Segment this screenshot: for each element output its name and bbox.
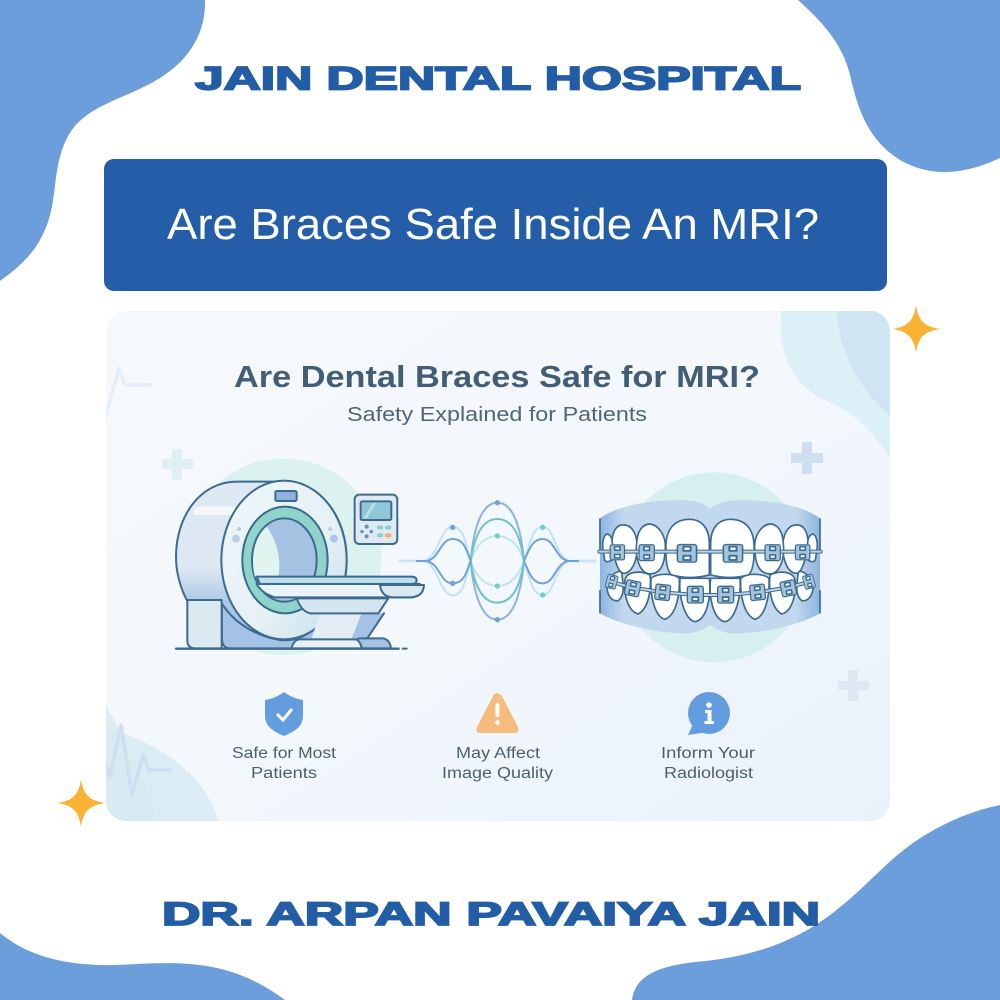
icon: shield check bbox=[265, 692, 303, 736]
illustration: radio waves bbox=[400, 500, 595, 622]
illustration: teeth with braces bbox=[599, 472, 821, 662]
icon: info speech bubble bbox=[688, 692, 730, 735]
label: inform your radiologist bbox=[661, 745, 755, 782]
label: safe for most patients: Safe for Most bbox=[232, 745, 337, 762]
background blob: bottom right bbox=[632, 805, 1000, 1000]
sparkle: bottom left bbox=[57, 779, 106, 827]
label: may affect image quality bbox=[442, 745, 553, 782]
label: safe for most patients bbox=[232, 745, 337, 782]
title banner bbox=[104, 159, 887, 291]
label: inform your radiologist: Inform Your bbox=[661, 745, 755, 762]
label: inform your radiologist: Radiologist bbox=[664, 765, 754, 782]
illustration: MRI scanner bbox=[176, 458, 424, 655]
hospital name heading: JAIN DENTAL HOSPITAL bbox=[195, 60, 801, 96]
doctor name footer: DR. ARPAN PAVAIYA JAIN bbox=[162, 896, 820, 932]
label: may affect image quality: Image Quality bbox=[442, 765, 553, 782]
title banner: Are Braces Safe Inside An MRI? bbox=[167, 200, 819, 249]
label: safe for most patients: Patients bbox=[251, 765, 317, 782]
panel: MRI illustration card bbox=[106, 311, 890, 821]
icon: warning triangle bbox=[476, 693, 519, 733]
panel heading: Are Dental Braces Safe for MRI? bbox=[234, 359, 760, 394]
background blob: bottom left bbox=[0, 933, 285, 1000]
label: may affect image quality: May Affect bbox=[456, 745, 541, 762]
sparkle: top right bbox=[892, 305, 941, 353]
background blob: top right bbox=[798, 0, 1000, 172]
background blob: top left bbox=[0, 0, 205, 281]
panel subheading: Safety Explained for Patients bbox=[347, 403, 647, 426]
